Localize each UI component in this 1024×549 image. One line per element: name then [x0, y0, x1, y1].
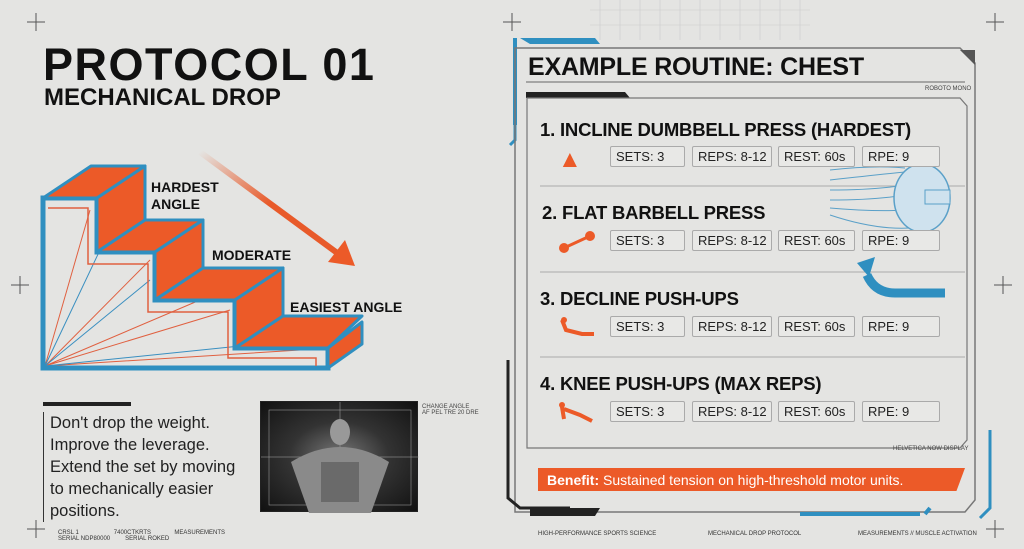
exercise 3: REPS: 8-12 — [698, 319, 767, 334]
exercise 4: RPE: 9 — [868, 404, 909, 419]
benefit bar: Benefit: Sustained tension on high-threshold motor units. — [547, 472, 903, 488]
exercise 1: RPE: 9 — [868, 149, 909, 164]
exercise 3: RPE: 9 — [868, 319, 909, 334]
exercise 2: 2. FLAT BARBELL PRESS — [542, 202, 765, 223]
blue arrow — [857, 257, 945, 298]
footer right: HIGH-PERFORMANCE SPORTS SCIENCE — [538, 531, 656, 537]
exercise 3: REST: 60s — [784, 319, 845, 334]
exercise 3: SETS: 3 — [616, 319, 664, 334]
exercise 1 — [540, 119, 940, 173]
text block: Don't drop the weight. Improve the leverage. Extend the set by moving to mechanically easier positions. — [50, 414, 235, 520]
exercise 2 — [542, 202, 940, 253]
exercise 1: SETS: 3 — [616, 149, 664, 164]
exercise 3: 3. DECLINE PUSH-UPS — [540, 288, 739, 309]
footer left: SERIAL NDP80000 SERIAL ROKED — [58, 536, 169, 542]
text: HELVETICA NOW DISPLAY — [893, 446, 968, 452]
icon: decline pushup — [560, 317, 594, 336]
text: AF PEL TRE 20 DRE — [422, 410, 479, 416]
exercise 2: REST: 60s — [784, 233, 845, 248]
exercise 4: REST: 60s — [784, 404, 845, 419]
routine title: EXAMPLE ROUTINE: CHEST — [528, 53, 864, 81]
footer right — [538, 530, 977, 537]
label: hardest — [151, 179, 219, 212]
muscle illustration — [830, 166, 951, 230]
label: easiest: EASIEST ANGLE — [290, 299, 402, 315]
exercise 4: 4. KNEE PUSH-UPS (MAX REPS) — [540, 373, 821, 394]
exercise 1: REPS: 8-12 — [698, 149, 767, 164]
footer right: MECHANICAL DROP PROTOCOL — [708, 531, 801, 537]
title: PROTOCOL 01 — [43, 39, 375, 90]
photo — [260, 401, 418, 512]
icon: incline press: ▲ — [558, 146, 582, 173]
exercise 2: REPS: 8-12 — [698, 233, 767, 248]
footer right: MEASUREMENTS // MUSCLE ACTIVATION — [858, 531, 977, 537]
footer left: CRSL 1 7400CTKRTS MEASUREMENTS — [58, 530, 225, 536]
exercise 4 — [540, 373, 940, 423]
label: hardest: ANGLE — [151, 196, 200, 212]
exercise 2: RPE: 9 — [868, 233, 909, 248]
exercise 1: REST: 60s — [784, 149, 845, 164]
exercise 3 — [540, 288, 940, 337]
exercise 1: 1. INCLINE DUMBBELL PRESS (HARDEST) — [540, 119, 911, 140]
exercise 4: SETS: 3 — [616, 404, 664, 419]
staircase diagram — [40, 153, 364, 370]
footer left — [58, 530, 225, 542]
routine panel frame — [506, 38, 992, 519]
exercise 4: REPS: 8-12 — [698, 404, 767, 419]
icon: barbell — [559, 231, 595, 253]
subtitle: MECHANICAL DROP — [44, 84, 281, 111]
label: hardest: HARDEST — [151, 179, 219, 195]
text: CHANGE ANGLE — [422, 404, 469, 410]
benefit bar — [538, 468, 965, 491]
exercise 2: SETS: 3 — [616, 233, 664, 248]
icon: knee pushup — [559, 402, 593, 423]
text: ROBOTO MONO — [925, 86, 971, 92]
label: moderate: MODERATE — [212, 247, 291, 263]
